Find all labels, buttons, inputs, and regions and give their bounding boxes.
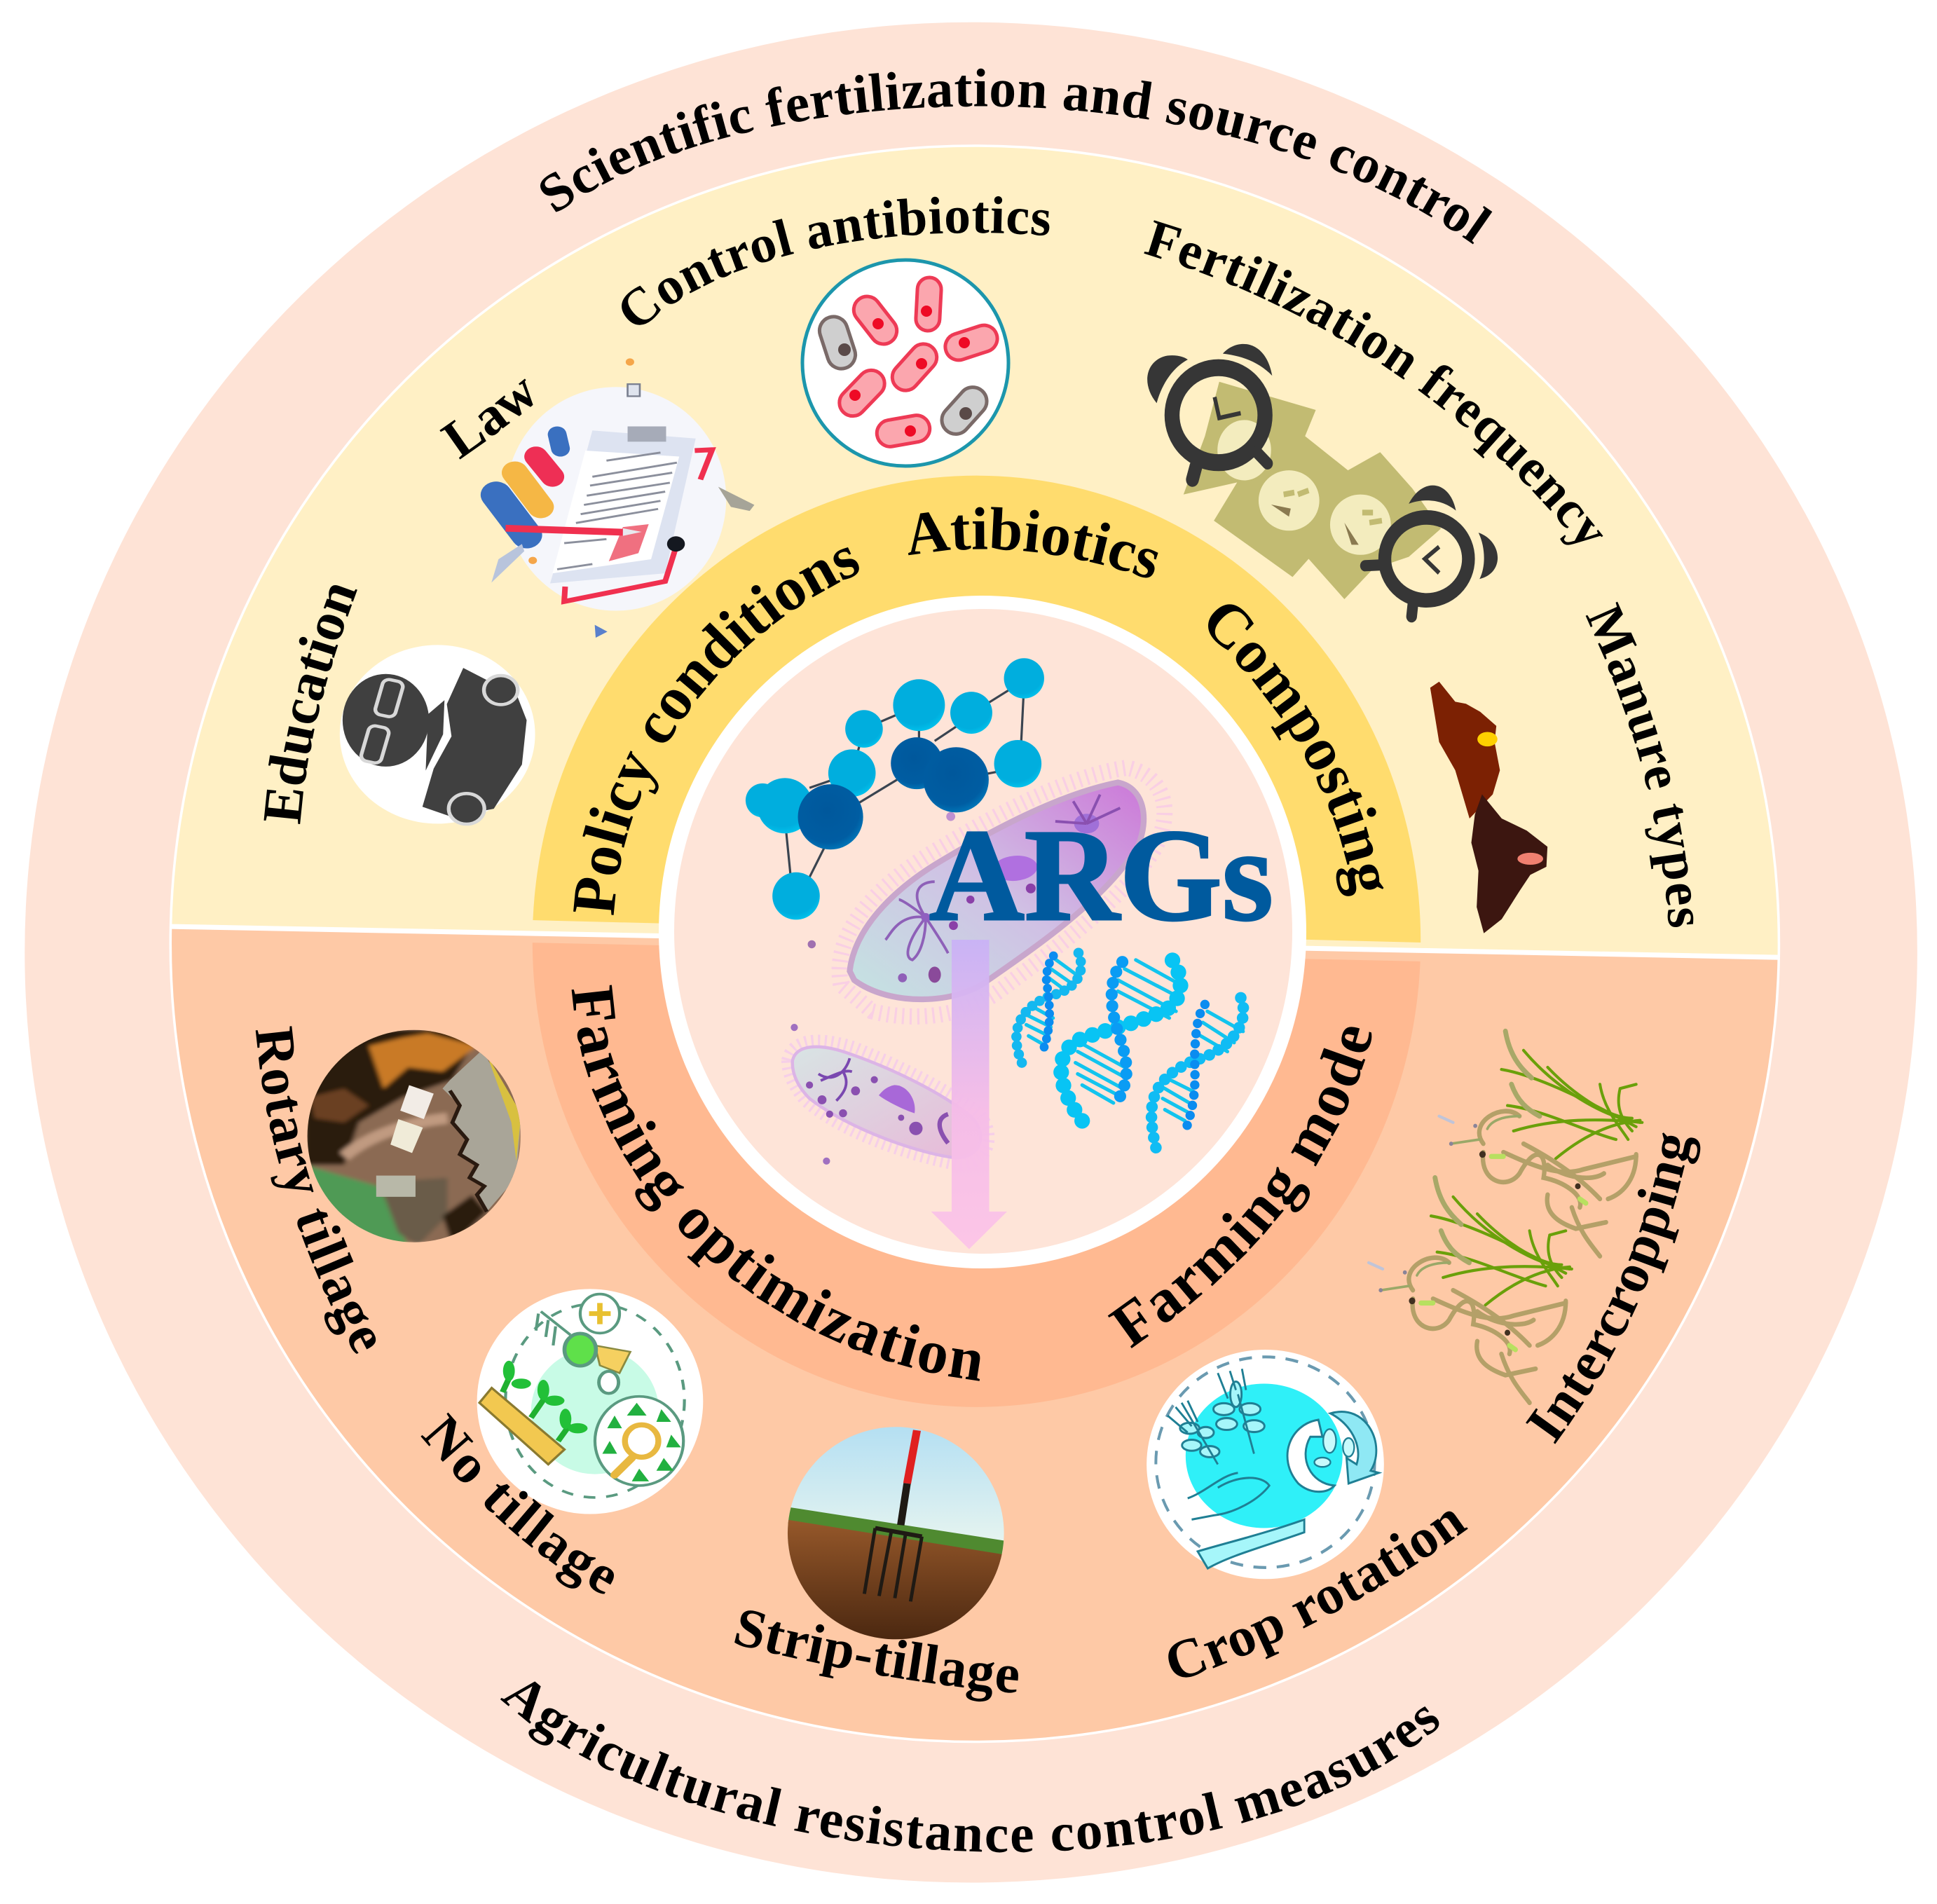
label: Composting: Composting <box>1208 604 1383 896</box>
label: Fertilization frequency: Fertilization frequency <box>1144 220 1603 545</box>
heading: Agricultural resistance control measures: Agricultural resistance control measures <box>500 1681 1439 1853</box>
label: Strip-tillage: Strip-tillage <box>734 1610 1018 1701</box>
label: Rotary tillage: Rotary tillage <box>255 1026 376 1354</box>
arrow: downward reduction <box>931 940 1007 1249</box>
icon: rotary tillage photo <box>305 1029 521 1246</box>
icon: manure types <box>1430 682 1547 933</box>
label: Control antibiotics: Control antibiotics <box>622 196 1050 325</box>
center illustration: molecule, microbes, DNA <box>746 658 1243 1249</box>
icon: intercropping plants <box>1369 1032 1642 1403</box>
label: Farming mode: Farming mode <box>1107 1027 1372 1348</box>
icon: law document <box>491 358 754 638</box>
title: ARGs: ARGs <box>929 802 1273 948</box>
icon: DNA helices <box>1016 951 1243 1148</box>
icon: strip tillage <box>787 1426 1006 1641</box>
label: Policy conditions: Policy conditions <box>573 547 859 915</box>
icon: fertilization frequency clocks <box>1147 344 1498 617</box>
label: Intercropping: Intercropping <box>1526 1132 1700 1444</box>
label: Crop rotation: Crop rotation <box>1168 1511 1468 1678</box>
icon: crop rotation <box>1147 1350 1384 1579</box>
label: Atibiotics: Atibiotics <box>908 507 1158 577</box>
label: No tillage: No tillage <box>420 1413 614 1594</box>
ring: scientific fertilization upper half <box>170 144 1780 957</box>
icon: no tillage <box>477 1289 703 1514</box>
icon: molecule <box>746 658 1044 919</box>
label: Manure types: Manure types <box>1585 601 1693 927</box>
panel: central white circle <box>659 596 1306 1268</box>
label: Farming optimization: Farming optimization <box>572 985 980 1381</box>
ring: agricultural measures lower half <box>170 926 1780 1744</box>
heading: Scientific fertilization and source control: Scientific fertilization and source control <box>540 69 1493 244</box>
label: Education: Education <box>263 585 357 824</box>
icon: paramecium small <box>787 1041 989 1165</box>
icon: control antibiotics bacteria <box>802 260 1008 466</box>
ring: orange inner lower half <box>533 943 1420 1407</box>
labels: curved text <box>255 69 1700 1853</box>
ring: yellow inner upper half <box>533 475 1421 943</box>
icon: education <box>340 645 535 824</box>
panel: central pale circle <box>674 609 1292 1254</box>
icon: paramecium large <box>790 768 1165 1165</box>
label: Law: Law <box>439 378 533 460</box>
